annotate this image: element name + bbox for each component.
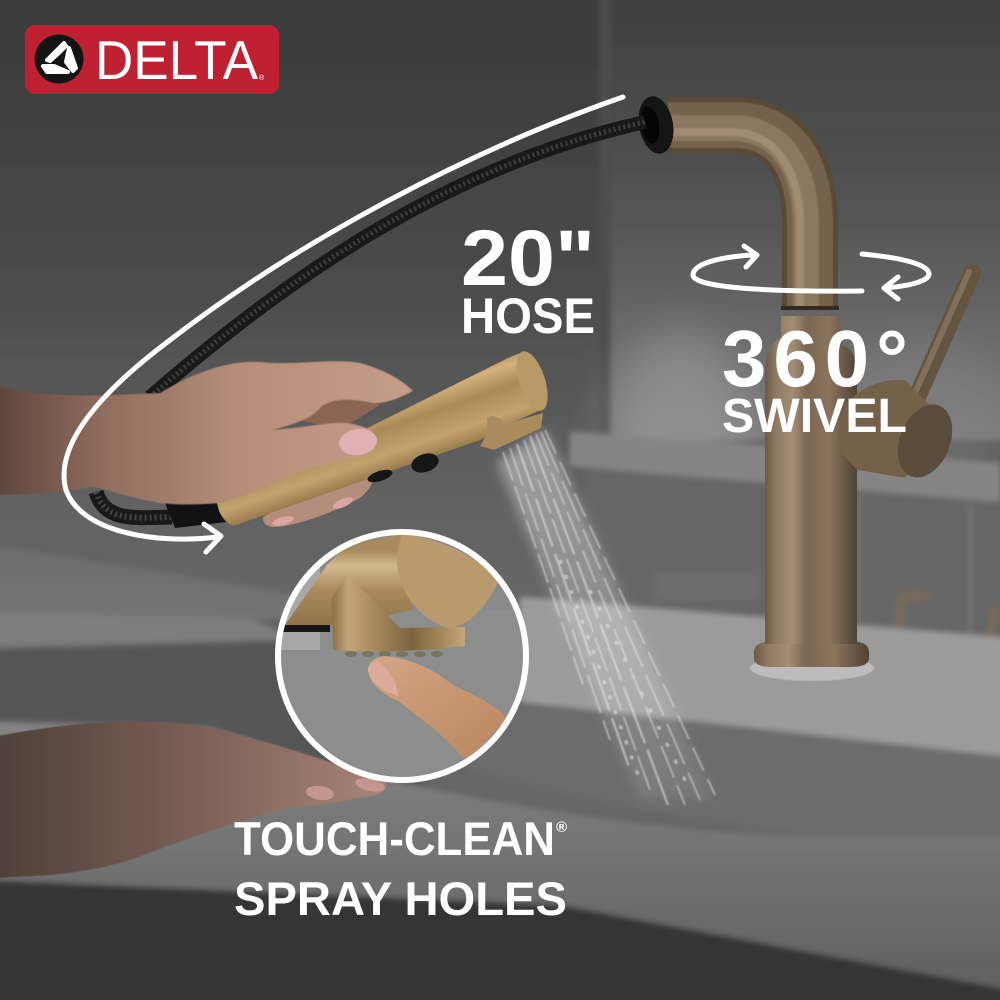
hose connector xyxy=(165,503,226,528)
thumb nail xyxy=(337,426,379,458)
forearm and hand xyxy=(0,361,413,504)
icon: delta mark xyxy=(34,34,84,84)
handle hub xyxy=(838,380,962,486)
lower hand on counter xyxy=(0,722,386,878)
arc arrow for hose xyxy=(64,97,623,552)
faucet base xyxy=(750,641,874,681)
inner fingers behind wand xyxy=(300,399,380,430)
faucet spout xyxy=(668,125,810,308)
swivel arrows xyxy=(693,246,929,299)
Delta logo badge: DELTA xyxy=(95,29,258,91)
pull-down wand xyxy=(217,348,554,526)
heading: 20" hose xyxy=(461,213,595,344)
heading: touch-clean spray holes: ® xyxy=(556,819,567,836)
spout opening xyxy=(634,93,678,157)
wand nozzle xyxy=(480,413,543,450)
heading: 20" hose: HOSE xyxy=(461,288,595,344)
heading: 360 swivel xyxy=(722,314,908,443)
heading: 360 swivel: 360° xyxy=(722,314,908,403)
heading: touch-clean spray holes xyxy=(234,812,567,925)
Delta logo badge xyxy=(25,25,279,94)
faucet column xyxy=(765,316,857,644)
heading: touch-clean spray holes: SPRAY HOLES xyxy=(234,872,567,925)
water spray xyxy=(497,430,716,805)
underside fingers xyxy=(263,475,375,528)
upper hand holding spray wand xyxy=(0,348,554,528)
handle lever xyxy=(911,272,972,404)
heading: 20" hose: 20" xyxy=(461,213,595,302)
hose loop xyxy=(96,492,172,518)
circular detail inset: touch-clean nozzle xyxy=(270,530,540,780)
Delta logo badge: ® xyxy=(259,74,265,82)
faucet body xyxy=(150,93,972,681)
wand buttons xyxy=(366,450,441,485)
fingernails xyxy=(305,776,386,802)
hose xyxy=(150,122,645,397)
wand end cap xyxy=(510,348,554,414)
heading: touch-clean spray holes: TOUCH-CLEAN xyxy=(234,812,555,865)
heading: 360 swivel: SWIVEL xyxy=(722,390,907,443)
